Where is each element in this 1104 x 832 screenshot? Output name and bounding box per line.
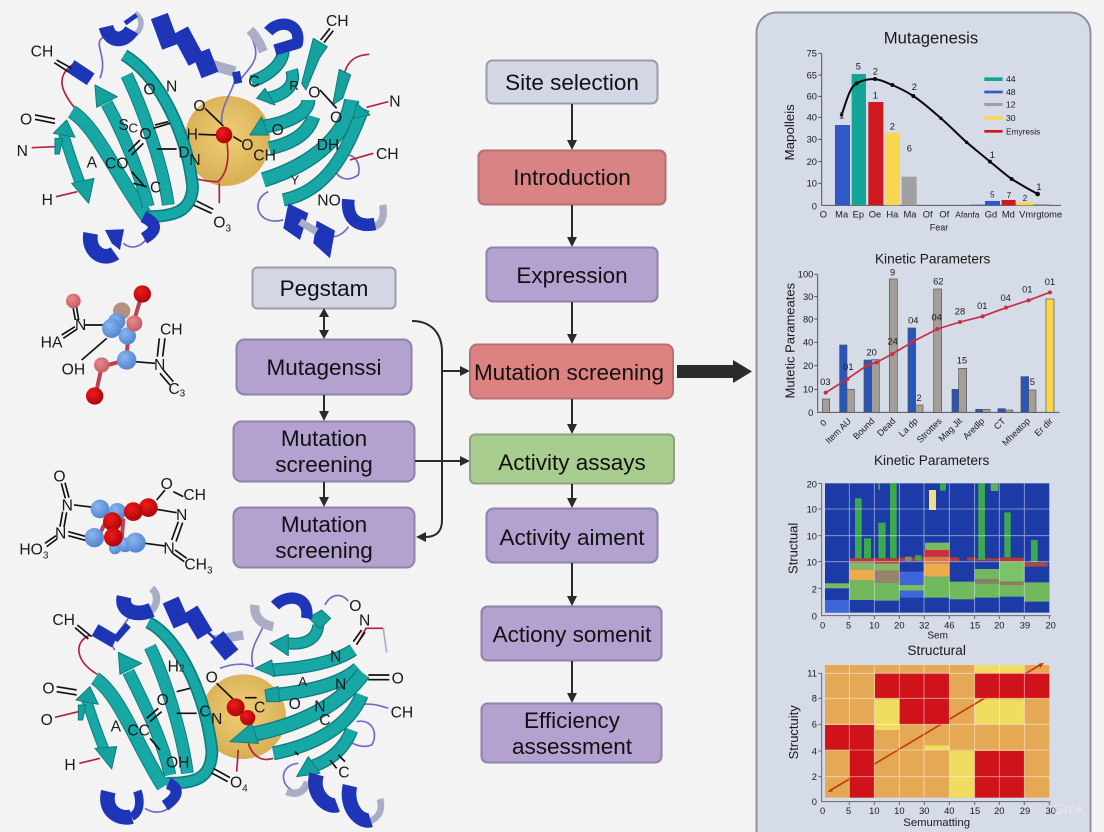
y tick labels bbox=[807, 49, 817, 211]
data labels: 01 bbox=[1045, 277, 1055, 287]
arrow: big arrow to results panel bbox=[677, 360, 752, 383]
x axis label: Fear bbox=[930, 223, 948, 233]
icon: yellow binding pocket bbox=[201, 674, 286, 759]
atom labels and bonds: N bbox=[189, 152, 201, 169]
tick labels: 20 bbox=[807, 479, 817, 489]
atom labels and bonds: N bbox=[17, 143, 28, 160]
legend: 44 bbox=[1006, 74, 1016, 84]
atom labels and bonds: C bbox=[319, 712, 331, 729]
atom labels and bonds: O bbox=[193, 98, 206, 115]
bonds bbox=[62, 295, 173, 390]
tick labels bbox=[807, 479, 1056, 630]
atom labels: N bbox=[154, 357, 165, 374]
tick labels: 15 bbox=[970, 620, 980, 630]
legend: 48 bbox=[1006, 87, 1016, 97]
data labels: 04 bbox=[931, 312, 942, 322]
grid lines bbox=[825, 665, 1049, 798]
tick labels: 20 bbox=[994, 620, 1005, 630]
box: Efficiency assessment bbox=[482, 704, 662, 762]
atom labels and bonds: CH bbox=[376, 146, 399, 163]
atom labels and bonds: N bbox=[211, 711, 222, 728]
x tick labels: Ma bbox=[904, 209, 917, 219]
atom labels and bonds: O bbox=[308, 85, 320, 102]
atom labels: CH bbox=[160, 321, 183, 338]
grid lines bbox=[825, 483, 1049, 613]
data labels: 2 bbox=[873, 67, 878, 77]
data labels: 28 bbox=[955, 306, 965, 316]
atom labels and bonds: A bbox=[298, 674, 307, 689]
atom labels and bonds: CH bbox=[391, 704, 413, 721]
box: Mutagenssi bbox=[236, 340, 412, 394]
bonds bbox=[45, 483, 187, 562]
chart: Structural heatmap bbox=[786, 643, 1085, 829]
atom labels and bonds: H bbox=[64, 757, 76, 774]
tick labels: 0 bbox=[812, 797, 817, 807]
atom labels and bonds: N bbox=[330, 649, 341, 666]
arrow bbox=[319, 395, 329, 421]
atom labels: 3 bbox=[207, 565, 213, 576]
legend bbox=[984, 74, 1040, 136]
y tick labels: 20 bbox=[803, 361, 813, 371]
y tick labels: 10 bbox=[803, 385, 813, 395]
tick labels: 0 bbox=[812, 611, 817, 621]
x tick labels: La dp bbox=[897, 416, 920, 439]
atom labels and bonds: R bbox=[289, 78, 299, 93]
box: Mutation screening: Mutation bbox=[281, 426, 367, 451]
atom labels: N bbox=[176, 507, 187, 524]
data labels: 15 bbox=[957, 356, 967, 366]
atom labels: N bbox=[75, 317, 86, 334]
coils bbox=[55, 595, 388, 812]
icon: yellow binding pocket bbox=[185, 96, 270, 186]
tick labels bbox=[807, 669, 1056, 816]
tick labels: 4 bbox=[812, 746, 817, 756]
arrow bbox=[567, 563, 577, 606]
box: Site selection: Site selection bbox=[505, 70, 639, 95]
chart: Kinetic Parameters heatmap bbox=[785, 453, 1056, 642]
x tick labels: Afanfa bbox=[955, 209, 980, 219]
box: Expression: Expression bbox=[516, 263, 628, 288]
atom labels: C bbox=[168, 381, 180, 398]
tick labels: 11 bbox=[807, 669, 817, 679]
box: Introduction: Introduction bbox=[513, 165, 631, 190]
legend: Emyresis bbox=[1006, 126, 1040, 136]
atom labels and bonds: Y bbox=[291, 173, 300, 187]
atom labels and bonds: C bbox=[128, 120, 138, 135]
left beta sheet bbox=[76, 622, 212, 787]
atom labels and bonds: O bbox=[157, 692, 169, 709]
arrow bbox=[319, 482, 329, 507]
atom labels and bonds: O bbox=[20, 111, 32, 128]
atom labels: N bbox=[55, 525, 66, 542]
box: Activity assays bbox=[470, 434, 674, 484]
coils bbox=[32, 32, 388, 247]
tick labels: 2 bbox=[812, 585, 817, 595]
atom labels and bonds: DH bbox=[317, 137, 339, 154]
trend line bbox=[840, 77, 1040, 196]
y tick labels: 80 bbox=[803, 314, 813, 324]
arrow bbox=[567, 661, 577, 703]
tick labels: 5 bbox=[846, 806, 851, 816]
tick labels: 46 bbox=[944, 620, 955, 630]
right beta sheet bbox=[230, 610, 363, 777]
data labels: 01 bbox=[1022, 284, 1033, 294]
y tick labels: 40 bbox=[803, 338, 813, 348]
protein structure: bottom bbox=[41, 588, 413, 821]
data labels: 2 bbox=[916, 393, 922, 403]
trend arrow bbox=[827, 663, 1044, 792]
axes bbox=[818, 483, 1051, 619]
data labels: 62 bbox=[933, 276, 944, 286]
tick labels: 5 bbox=[846, 620, 851, 630]
x tick labels: Vmrgtome bbox=[1019, 209, 1062, 219]
tick labels: 2 bbox=[812, 772, 817, 782]
data labels: 7 bbox=[1007, 191, 1012, 200]
alpha helices bbox=[95, 588, 381, 821]
box: Mutagenssi: Mutagenssi bbox=[266, 355, 382, 380]
box: Pegstam: Pegstam bbox=[280, 276, 368, 301]
box: Mutation screening bbox=[234, 422, 414, 482]
atom labels and bonds: D bbox=[178, 145, 190, 162]
atom labels and bonds: 4 bbox=[242, 783, 248, 794]
x tick labels: 0 bbox=[818, 418, 829, 428]
arrow bbox=[567, 484, 577, 508]
heatmap base bbox=[825, 665, 1049, 798]
data labels: 1 bbox=[990, 150, 995, 160]
x tick labels: Aredlp bbox=[961, 416, 986, 441]
tick labels: 0 bbox=[820, 806, 825, 816]
molecule: top small bbox=[41, 285, 186, 405]
data labels: 1 bbox=[873, 91, 878, 101]
tick labels: 20 bbox=[1045, 620, 1056, 630]
x tick labels: Item AU bbox=[823, 416, 853, 446]
tick labels: 10 bbox=[807, 531, 817, 541]
atom labels and bonds: O bbox=[143, 81, 156, 98]
x tick labels: CT bbox=[992, 416, 1008, 432]
atom labels and bonds: C bbox=[254, 699, 265, 716]
x tick labels: Ep bbox=[853, 209, 864, 219]
atoms bbox=[85, 498, 158, 554]
atom labels and bonds: O bbox=[41, 712, 53, 729]
axes bbox=[818, 53, 1061, 205]
data labels: 5 bbox=[1030, 377, 1035, 387]
x tick labels bbox=[818, 416, 1055, 448]
data labels bbox=[820, 268, 1055, 403]
tick labels: 20 bbox=[894, 620, 905, 630]
heatmap cells bbox=[825, 483, 1049, 613]
atom labels: N bbox=[62, 498, 73, 515]
tick labels: 30 bbox=[1045, 806, 1056, 816]
y tick labels: 100 bbox=[798, 270, 813, 280]
x tick labels: Mheatop bbox=[1000, 416, 1032, 448]
atom labels and bonds: O bbox=[272, 122, 284, 139]
legend: 30 bbox=[1006, 113, 1016, 123]
atom labels and bonds: H bbox=[187, 126, 198, 143]
x tick labels: Gd bbox=[985, 209, 997, 219]
atom labels: CH bbox=[183, 487, 206, 504]
x tick labels: Of bbox=[923, 209, 933, 219]
legend: 12 bbox=[1006, 100, 1016, 110]
box: Efficiency assessment: assessment bbox=[512, 734, 633, 759]
atom labels and bonds: CH bbox=[52, 612, 75, 629]
box: Actiony somenit: Actiony somenit bbox=[493, 622, 652, 647]
box: Expression bbox=[486, 248, 658, 302]
x tick labels: Ha bbox=[886, 209, 899, 219]
tick labels: 32 bbox=[919, 620, 930, 630]
atom labels and bonds: N bbox=[389, 94, 401, 111]
tick labels: 20 bbox=[994, 806, 1005, 816]
tick labels: 30 bbox=[919, 806, 930, 816]
atom labels and bonds: N bbox=[359, 613, 370, 630]
atom labels and bonds: CH bbox=[326, 13, 349, 30]
atom labels and bonds: C bbox=[338, 764, 350, 781]
atom labels: HA bbox=[41, 334, 63, 351]
atom labels: HO bbox=[19, 541, 43, 558]
atom labels and bonds: O bbox=[230, 774, 242, 791]
data labels: 1 bbox=[1036, 182, 1042, 192]
panel: results bbox=[756, 12, 1090, 832]
tick labels: 15 bbox=[970, 806, 980, 816]
data labels: 2 bbox=[912, 82, 917, 92]
x axis label: Semumatting bbox=[903, 817, 970, 829]
tick labels: 0 bbox=[820, 620, 825, 630]
tick labels: 10 bbox=[869, 806, 880, 816]
atom labels and bonds: O bbox=[139, 126, 152, 143]
alpha helices bbox=[71, 13, 383, 258]
y tick labels: 60 bbox=[807, 92, 817, 102]
red cells bbox=[825, 673, 1049, 798]
box: Introduction bbox=[478, 150, 666, 204]
chart title: Mutagenesis bbox=[884, 28, 978, 47]
connector: bracket between columns bbox=[412, 321, 470, 542]
tick labels: 10 bbox=[894, 806, 905, 816]
box: Mutation screening 2: Mutation bbox=[281, 512, 367, 537]
axes bbox=[814, 274, 1059, 412]
y tick labels: 20 bbox=[807, 157, 817, 167]
y tick labels: 0 bbox=[812, 201, 817, 211]
box: Actiony somenit bbox=[482, 606, 662, 660]
atom labels and bonds: O bbox=[213, 214, 225, 231]
data labels: 01 bbox=[843, 362, 854, 372]
atom labels and bonds: C bbox=[150, 179, 161, 196]
atom labels and bonds: 3 bbox=[225, 223, 231, 234]
atom labels and bonds: O bbox=[349, 598, 361, 615]
atom labels: CH bbox=[184, 556, 207, 573]
tick labels: 10 bbox=[807, 558, 817, 568]
y tick labels: 0 bbox=[808, 408, 813, 418]
x tick labels: Bound bbox=[851, 416, 876, 441]
box: Mutation screening highlighted: Mutation screening bbox=[474, 360, 664, 385]
box: Activity aiment: Activity aiment bbox=[499, 525, 645, 550]
atom labels bbox=[41, 317, 186, 400]
atom labels and bonds: H bbox=[42, 192, 53, 209]
x axis label: Sem bbox=[927, 631, 948, 642]
data labels: 9 bbox=[890, 268, 895, 278]
y axis label: Mutetic Parameates bbox=[782, 282, 797, 398]
data labels bbox=[839, 61, 1042, 203]
atom labels bbox=[19, 468, 213, 576]
y tick labels: 65 bbox=[807, 70, 817, 80]
x tick labels bbox=[820, 209, 1062, 219]
arrow bbox=[567, 399, 577, 434]
axes bbox=[818, 673, 1051, 805]
data labels: 04 bbox=[908, 315, 919, 325]
data labels: 1 bbox=[839, 111, 844, 121]
x tick labels: Strottes bbox=[915, 416, 944, 445]
data labels: 01 bbox=[977, 301, 988, 311]
y tick labels bbox=[798, 270, 813, 418]
box: Mutation screening 2 bbox=[234, 508, 414, 568]
arrow bbox=[567, 104, 577, 150]
tick labels: 39 bbox=[1020, 620, 1030, 630]
x tick labels: Of bbox=[939, 209, 950, 219]
flowchart: centre column bbox=[470, 60, 674, 762]
x tick labels: Er dir bbox=[1032, 416, 1055, 438]
atom labels and bonds: O bbox=[241, 137, 253, 154]
atom labels and bonds: C bbox=[248, 74, 260, 91]
chart title: Kinetic Parameters bbox=[874, 453, 989, 468]
atom labels: 3 bbox=[43, 550, 49, 561]
trend line bbox=[824, 290, 1052, 395]
data labels: 5 bbox=[990, 190, 995, 199]
atoms bbox=[66, 285, 151, 405]
x tick labels: Oe bbox=[869, 209, 881, 219]
atom labels and bonds: C bbox=[199, 704, 211, 721]
right beta sheet bbox=[250, 38, 370, 200]
x tick labels: O bbox=[820, 209, 827, 219]
data labels: 6 bbox=[907, 144, 912, 154]
atom labels and bonds: S bbox=[118, 117, 129, 134]
atom labels and bonds: OH bbox=[166, 754, 189, 771]
box: Efficiency assessment: Efficiency bbox=[524, 708, 621, 733]
data labels: 24 bbox=[887, 336, 898, 346]
bars bbox=[822, 279, 1054, 412]
tick labels: 10 bbox=[869, 620, 880, 630]
x tick labels: Mag Jit bbox=[937, 416, 964, 444]
tick labels: 40 bbox=[944, 806, 955, 816]
data labels: 04 bbox=[1000, 293, 1011, 303]
atom labels and bonds: O bbox=[392, 670, 404, 687]
box: Activity assays: Activity assays bbox=[498, 450, 646, 475]
y axis label: Structuity bbox=[786, 705, 801, 759]
atom labels and bonds bbox=[17, 13, 401, 234]
bars bbox=[835, 74, 1049, 205]
y tick labels: 30 bbox=[803, 292, 813, 302]
atom labels: N bbox=[163, 540, 175, 557]
tick labels: 10 bbox=[807, 505, 817, 515]
box: Mutation screening: screening bbox=[275, 452, 373, 477]
data labels: 03 bbox=[820, 377, 831, 387]
box: Mutation screening 2: screening bbox=[275, 538, 373, 563]
watermark: Grok bbox=[1053, 802, 1085, 818]
atom labels and bonds: A bbox=[87, 154, 98, 171]
atom labels and bonds: CC bbox=[127, 723, 150, 740]
atom labels: 3 bbox=[180, 389, 186, 400]
yellow cells bbox=[875, 665, 1024, 798]
atom labels and bonds: H2 bbox=[168, 659, 185, 676]
y tick labels: 30 bbox=[807, 135, 817, 145]
atom labels: OH bbox=[62, 361, 85, 378]
atom labels and bonds: NO bbox=[317, 193, 341, 210]
left beta sheet bbox=[53, 55, 193, 217]
arrow: double-headed Pegstam to Mutagenssi bbox=[319, 308, 329, 339]
chart title: Kinetic Parameters bbox=[875, 251, 990, 266]
molecule: lower small bbox=[19, 468, 213, 576]
data labels: 20 bbox=[866, 348, 877, 358]
chart title: Structural bbox=[907, 643, 966, 658]
tick labels: 6 bbox=[812, 720, 817, 730]
arrow bbox=[567, 302, 577, 344]
tick labels: 29 bbox=[1020, 806, 1030, 816]
data labels: 5 bbox=[856, 61, 861, 71]
protein structure: top bbox=[17, 13, 401, 258]
y tick labels: 10 bbox=[807, 179, 817, 189]
atom labels and bonds: O bbox=[330, 110, 342, 127]
atom labels: O bbox=[161, 476, 173, 493]
box: Site selection bbox=[486, 60, 658, 104]
atom labels and bonds: CO bbox=[105, 155, 128, 172]
y tick labels: 40 bbox=[807, 113, 817, 123]
arrow bbox=[567, 205, 577, 247]
atom labels and bonds: N bbox=[166, 79, 177, 96]
atom labels and bonds: CH bbox=[253, 148, 276, 165]
chart: Kinetic Parameters bars bbox=[782, 251, 1059, 448]
box: Activity aiment bbox=[486, 508, 658, 562]
atom labels: O bbox=[53, 468, 66, 485]
atom labels and bonds: O bbox=[42, 680, 55, 697]
atom labels and bonds: O bbox=[206, 669, 218, 686]
box: Mutation screening highlighted bbox=[470, 344, 673, 398]
atom labels and bonds: N bbox=[314, 699, 326, 716]
flowchart: left column bbox=[234, 268, 414, 568]
atom labels and bonds: O bbox=[289, 696, 301, 713]
data labels: 2 bbox=[890, 122, 895, 132]
y axis label: Structual bbox=[785, 523, 800, 574]
x tick labels: Dead bbox=[875, 416, 897, 438]
x tick labels: Ma bbox=[835, 209, 849, 219]
atom labels and bonds: CH bbox=[31, 44, 53, 61]
atom labels and bonds: N bbox=[335, 676, 346, 693]
atom labels and bonds bbox=[41, 598, 413, 794]
y tick labels: 75 bbox=[807, 49, 817, 59]
data labels: 2 bbox=[1023, 194, 1028, 203]
box: Pegstam bbox=[252, 268, 396, 308]
tick labels: 8 bbox=[812, 694, 817, 704]
chart: Mutagenesis bbox=[782, 28, 1062, 233]
x tick labels: Md bbox=[1002, 209, 1015, 219]
atom labels and bonds: A bbox=[111, 719, 122, 736]
y axis label: Mapolleis bbox=[782, 104, 797, 160]
